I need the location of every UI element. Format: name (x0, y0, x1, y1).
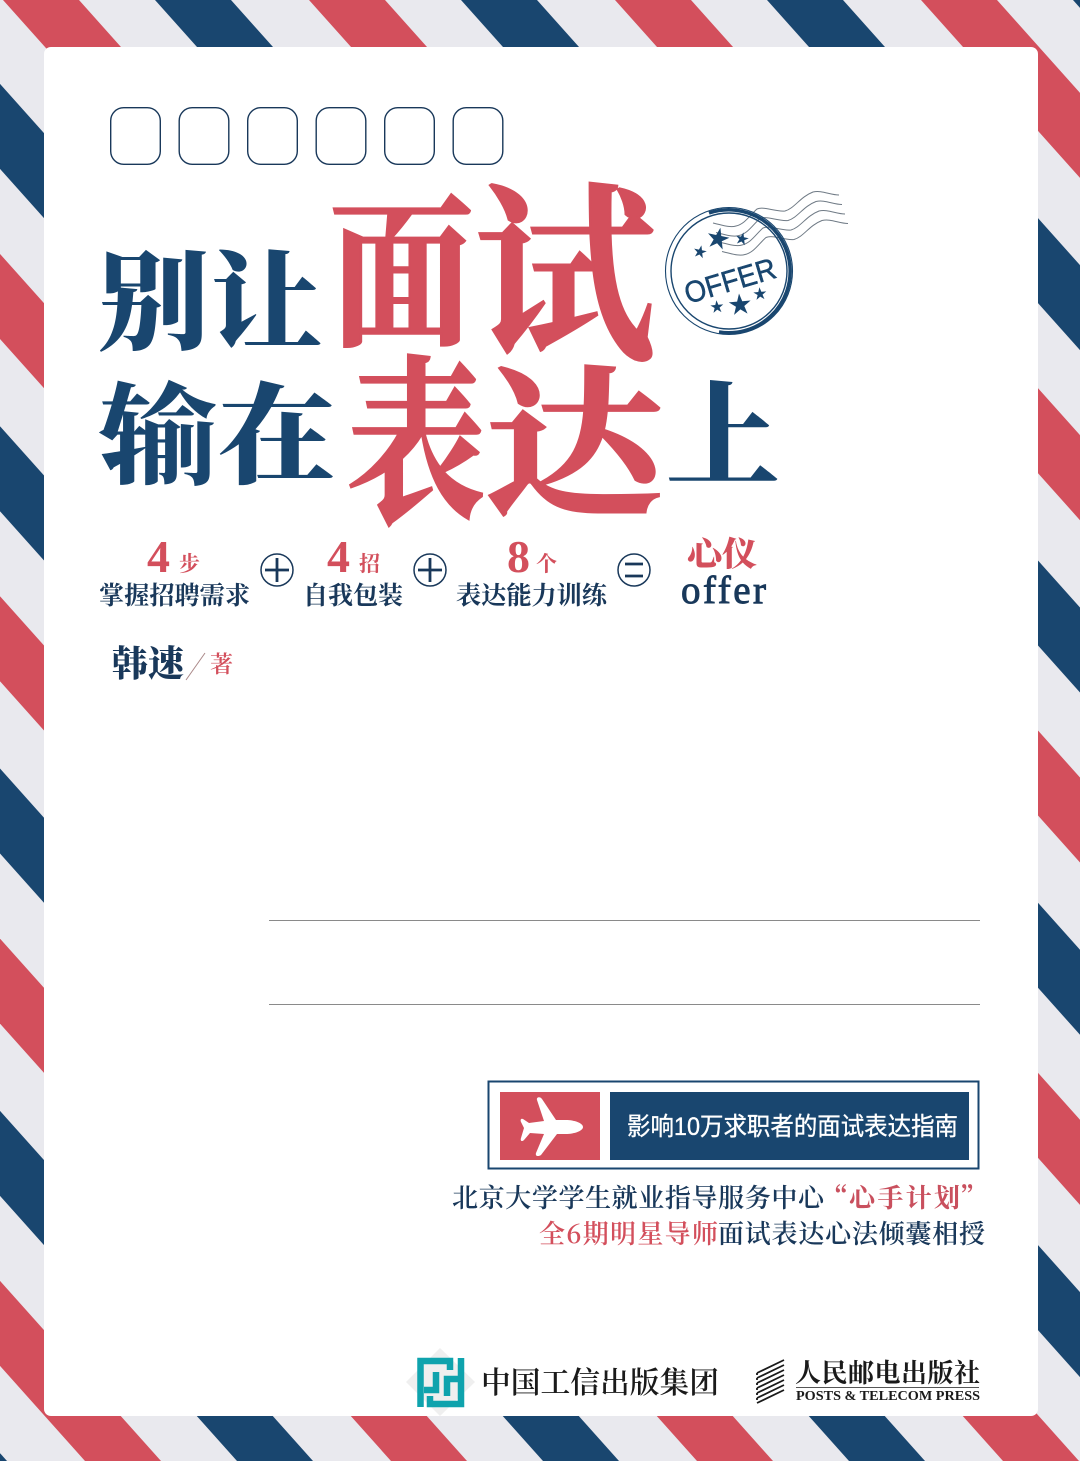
author role: 著 (210, 646, 233, 679)
icon: equals (618, 554, 650, 586)
postcode boxes (111, 108, 503, 164)
author name: 韩速 (112, 636, 187, 687)
endorsement line 2 (539, 1214, 985, 1251)
label: 掌握招聘需求: 掌握招聘需求 (99, 576, 250, 612)
icon: book stack (757, 1360, 784, 1403)
icon: plane (521, 1097, 583, 1156)
item: 4招: 招 (359, 552, 380, 576)
title: red calligraphy 表达: 达 (485, 316, 672, 549)
address line 1 (269, 920, 980, 922)
title: red calligraphy 表达 (347, 301, 672, 559)
title: red calligraphy 表达: 表 (347, 301, 486, 559)
item: 4步: 4 (147, 531, 170, 582)
english name: POSTS & TELECOM PRESS (796, 1389, 980, 1404)
rule (796, 1386, 979, 1388)
chinese name: 人民邮电出版社 (795, 1353, 980, 1390)
logo maze (420, 1358, 461, 1407)
formula row (99, 527, 766, 612)
stamp word OFFER: OFFER (681, 252, 780, 311)
red plane tile (500, 1092, 600, 1160)
endorsement line 1: ” (960, 1178, 986, 1215)
title: red calligraphy 面试 (329, 126, 655, 398)
result: 心仪: 心仪 (687, 527, 757, 576)
banner text: 影响10万求职者的面试表达指南 (627, 1113, 958, 1141)
OFFER postmark stamp (666, 192, 848, 334)
label: 自我包装: 自我包装 (303, 576, 403, 612)
title: navy text 输在: 输在 (98, 349, 336, 507)
title: navy text 别让: 别让 (97, 217, 323, 372)
endorsement line 2: 面试表达心法倾囊相授 (718, 1214, 985, 1251)
title: red calligraphy 面试: 面 (329, 144, 474, 381)
endorsement line 1 (452, 1178, 986, 1215)
icon: plus (261, 554, 293, 586)
postmark wavy lines (713, 192, 848, 255)
logo name: 中国工信出版集团 (481, 1358, 719, 1402)
result: offer: offer (681, 569, 766, 612)
slash (186, 653, 205, 680)
stamp rings (666, 208, 792, 334)
label: 表达能力训练: 表达能力训练 (456, 576, 609, 612)
boarding-pass banner (488, 1082, 978, 1168)
title: navy text 上: 上 (666, 345, 780, 509)
author (112, 636, 233, 687)
navy tile (610, 1092, 969, 1160)
endorsement line 1: “ (822, 1178, 848, 1215)
publisher logo: 中国工信出版集团 (406, 1348, 719, 1416)
item: 4步: 步 (179, 552, 200, 576)
logo diamond (406, 1348, 475, 1416)
address line 2 (269, 1004, 980, 1006)
endorsement line 2: 全6期明星导师 (539, 1214, 718, 1251)
item: 8个: 8 (507, 531, 530, 582)
endorsement line 1: 心手计划 (849, 1178, 960, 1215)
stamp stars (693, 225, 767, 315)
item: 8个: 个 (536, 552, 557, 576)
title: red calligraphy 面试: 试 (475, 126, 655, 398)
endorsement line 1: 北京大学学生就业指导服务中心 (452, 1178, 827, 1215)
publisher logo: 人民邮电出版社 (757, 1353, 980, 1404)
icon: plus (414, 554, 446, 586)
item: 4招: 4 (327, 531, 350, 582)
